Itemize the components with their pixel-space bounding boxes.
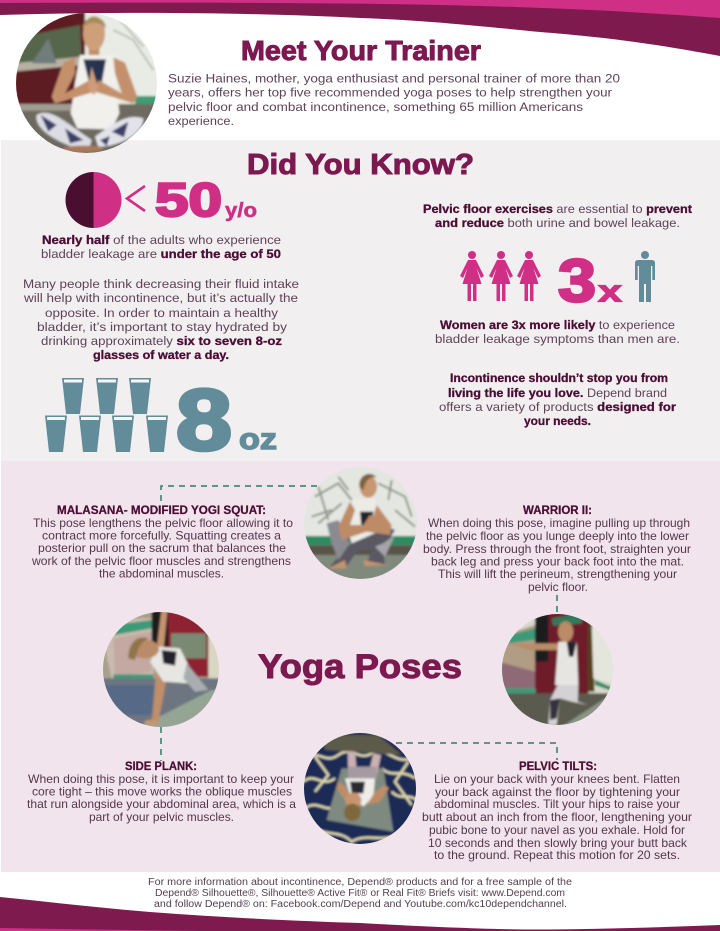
- text block: nearly half: [41, 233, 281, 261]
- text block: depend brand message: [439, 371, 676, 428]
- text block: warrior II: back leg and press your back foot into the mat.: [431, 556, 684, 568]
- footer text: [148, 877, 573, 910]
- photo: malasana squat: [304, 467, 417, 579]
- text block: trainer introduction: pelvic floor and combat incontinence, something 65 million Americans: [168, 100, 583, 114]
- text block: trainer introduction: years, offers her top five recommended yoga poses to help strengthen your: [168, 86, 612, 100]
- text block: hydration advice: bladder, it’s important to stay hydrated by: [37, 320, 288, 334]
- text block: pelvic floor exercises: Pelvic floor exercises are essential to prevent: [423, 202, 692, 216]
- stat: 8 oz: [176, 372, 277, 468]
- text block: side plank: When doing this pose, it is important to keep your: [28, 773, 294, 786]
- text block: depend brand message: living the life you love. Depend brand: [448, 386, 667, 400]
- text block: side plank: that run alongside your abdominal area, which is a: [27, 798, 297, 811]
- photo: pelvic tilt: [304, 733, 416, 844]
- text block: warrior II: pelvic floor.: [528, 581, 588, 594]
- text block: side plank: core tight – this move works the oblique muscles: [32, 786, 292, 798]
- text block: hydration advice: opposite. In order to maintain a healthy: [45, 306, 279, 320]
- photo: side plank: [103, 612, 219, 727]
- text block: trainer introduction: Suzie Haines, mother, yoga enthusiast and personal trainer of more than 20: [168, 72, 620, 86]
- photo: trainer seated in prayer pose: [16, 13, 157, 153]
- text block: warrior II: When doing this pose, imagine pulling up through: [428, 517, 690, 530]
- text block: pelvic tilts: to the ground. Repeat this motion for 20 sets.: [434, 849, 680, 862]
- bottom wave banner: [0, 897, 720, 931]
- icon: half-filled circle with under 50 y/o: 50: [155, 173, 222, 226]
- icon: man: [635, 251, 655, 302]
- text block: hydration advice: will help with incontinence, but it’s actually the: [23, 291, 298, 305]
- text block: malasana: [31, 505, 293, 580]
- stat: 8 oz: oz: [239, 423, 277, 456]
- connector: side plank photo to text: [160, 727, 162, 761]
- title: Yoga Poses: Yoga Poses: [258, 648, 462, 686]
- stat: 3x: 3: [558, 248, 596, 314]
- text block: hydration advice: [23, 277, 299, 362]
- connector: pelvic tilt photo to text: [396, 743, 557, 760]
- stat: 3x: [558, 248, 623, 314]
- text block: hydration advice: glasses of water a day.: [93, 348, 229, 362]
- photo: warrior II: [502, 614, 613, 725]
- text block: malasana: This pose lengthens the pelvic floor allowing it to: [33, 517, 293, 530]
- text block: pelvic tilts: butt about an inch from the floor, lengthening your: [422, 811, 692, 824]
- footer text: Depend® Silhouette®, Silhouette® Active Fit® or Real Fit® Briefs visit: www.Depend.com: [155, 888, 565, 899]
- icon: three women: [460, 251, 541, 301]
- text block: trainer introduction: [168, 72, 620, 128]
- text block: pelvic floor exercises: and reduce both urine and bowel leakage.: [435, 216, 680, 230]
- icon: eight water glasses: [45, 378, 168, 452]
- text block: pelvic tilts: Lie on your back with your knees bent. Flatten: [434, 773, 680, 786]
- icon: half-filled circle with under 50 y/o: y/o: [225, 200, 257, 222]
- icon: half-filled circle with under 50 y/o: [66, 172, 257, 228]
- title: Meet Your Trainer: Meet Your Trainer: [241, 35, 481, 66]
- text block: hydration advice: Many people think decreasing their fluid intake: [23, 277, 299, 291]
- footer text: and follow Depend® on: Facebook.com/Depend and Youtube.com/kc10dependchannel.: [154, 899, 567, 910]
- panel: yoga poses background: [1, 461, 720, 872]
- text block: side plank: part of your pelvic muscles.: [89, 811, 234, 824]
- text block: depend brand message: your needs.: [524, 414, 591, 428]
- text block: malasana: MALASANA- MODIFIED YOGI SQUAT:: [57, 505, 266, 517]
- text block: pelvic tilts: PELVIC TILTS:: [519, 761, 597, 773]
- text block: pelvic tilts: pubic bone to your navel as you exhale. Hold for: [429, 824, 685, 837]
- text block: pelvic floor exercises: [423, 202, 692, 230]
- text block: depend brand message: offers a variety of products designed for: [439, 400, 676, 414]
- top wave banner: [0, 0, 720, 56]
- text block: malasana: work of the pelvic floor muscles and strengthens: [31, 555, 291, 568]
- connector: warrior text to photo: [556, 595, 558, 614]
- text block: hydration advice: drinking approximately six to seven 8-oz: [41, 334, 282, 348]
- text block: warrior II: WARRIOR II:: [523, 505, 592, 517]
- text block: pelvic tilts: abdominal muscles. Tilt your hips to raise your: [434, 798, 680, 811]
- text block: warrior II: [423, 505, 691, 594]
- stat: 3x: x: [598, 274, 623, 308]
- panel: did you know background: [1, 140, 720, 461]
- text block: warrior II: the pelvic floor as you lunge deeply into the lower: [426, 530, 689, 543]
- text block: pelvic tilts: [422, 761, 692, 862]
- text block: warrior II: This will lift the perineum, strengthening your: [438, 568, 677, 581]
- text block: depend brand message: Incontinence shouldn’t stop you from: [450, 371, 668, 385]
- text block: warrior II: body. Press through the front foot, straighten your: [423, 543, 691, 556]
- text block: side plank: [27, 761, 297, 824]
- text block: side plank: SIDE PLANK:: [125, 761, 197, 773]
- text block: pelvic tilts: 10 seconds and then slowly bring your butt back: [428, 837, 687, 850]
- text block: malasana: contract more forcefully. Squatting creates a: [42, 530, 282, 542]
- text block: nearly half: Nearly half of the adults who experience: [42, 233, 281, 247]
- connector: squat photo to text: [161, 486, 317, 502]
- text block: nearly half: bladder leakage are under the age of 50: [41, 247, 281, 261]
- heading: Did You Know?: Did You Know?: [247, 149, 474, 181]
- footer text: For more information about incontinence, Depend® products and for a free sample of the: [148, 877, 573, 888]
- text block: women 3x more likely: Women are 3x more likely to experience: [440, 318, 675, 332]
- text block: malasana: posterior pull on the sacrum that balances the: [38, 542, 286, 555]
- text block: women 3x more likely: [435, 318, 680, 346]
- text block: malasana: the abdominal muscles.: [99, 568, 224, 580]
- stat: 8 oz: 8: [176, 372, 232, 468]
- text block: women 3x more likely: bladder leakage symptoms than men are.: [435, 332, 680, 346]
- text block: trainer introduction: experience.: [168, 114, 234, 128]
- text block: pelvic tilts: your back against the floor by tightening your: [435, 786, 680, 799]
